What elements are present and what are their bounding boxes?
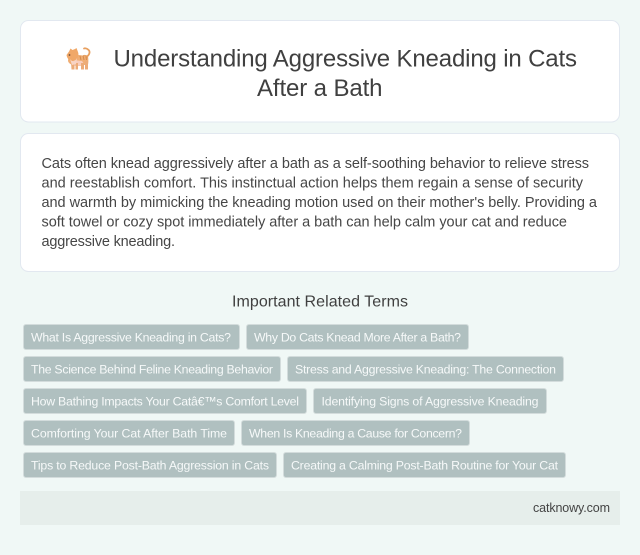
panel: title card	[20, 20, 620, 122]
title: Understanding Aggressive Kneading in Cats	[114, 46, 577, 72]
heading: related terms: Important Related Terms	[232, 294, 408, 310]
tag: Identifying Signs of Aggressive Kneading	[322, 394, 539, 408]
title: After a Bath	[257, 75, 382, 102]
panel: description	[20, 134, 620, 272]
tag: Why Do Cats Knead More After a Bath?	[254, 330, 461, 344]
tag: Comforting Your Cat After Bath Time	[31, 426, 227, 440]
tag	[24, 324, 240, 350]
text block: description: and reestablish comfort. This instinctual action helps them regain a sense of security	[42, 176, 584, 192]
tag: What Is Aggressive Kneading in Cats?	[31, 330, 231, 344]
title	[114, 46, 577, 102]
tag: Stress and Aggressive Kneading: The Connection	[295, 362, 556, 376]
tag	[284, 452, 566, 478]
tag	[24, 388, 306, 414]
tag: When Is Kneading a Cause for Concern?	[249, 426, 462, 440]
footer: catknowy.com	[533, 501, 610, 515]
tag	[246, 324, 468, 350]
tag: The Science Behind Feline Kneading Behavior	[31, 362, 273, 376]
text block: description: Cats often knead aggressively after a bath as a self-soothing behavior to relieve stress	[42, 156, 589, 172]
tag: Creating a Calming Post-Bath Routine for Your Cat	[291, 458, 559, 472]
tags: related terms	[24, 324, 566, 478]
tag	[288, 356, 564, 382]
text block: description: and warmth by mimicking the kneading motion used on their mother's belly. Providing a	[42, 195, 598, 211]
footer	[20, 491, 620, 525]
tag	[314, 388, 546, 414]
tag: Tips to Reduce Post-Bath Aggression in Cats	[31, 458, 269, 472]
icon: cat	[66, 48, 90, 70]
text block: description: soft towel or cozy spot immediately after a bath can help calm your cat and reduce	[42, 214, 567, 230]
tag: How Bathing Impacts Your Catâ€™s Comfort Level	[31, 394, 299, 408]
tag	[24, 420, 234, 446]
tag	[24, 356, 280, 382]
tag	[24, 452, 276, 478]
text block: description: aggressive kneading.	[42, 234, 175, 250]
tag	[242, 420, 470, 446]
text block: description	[42, 156, 598, 250]
